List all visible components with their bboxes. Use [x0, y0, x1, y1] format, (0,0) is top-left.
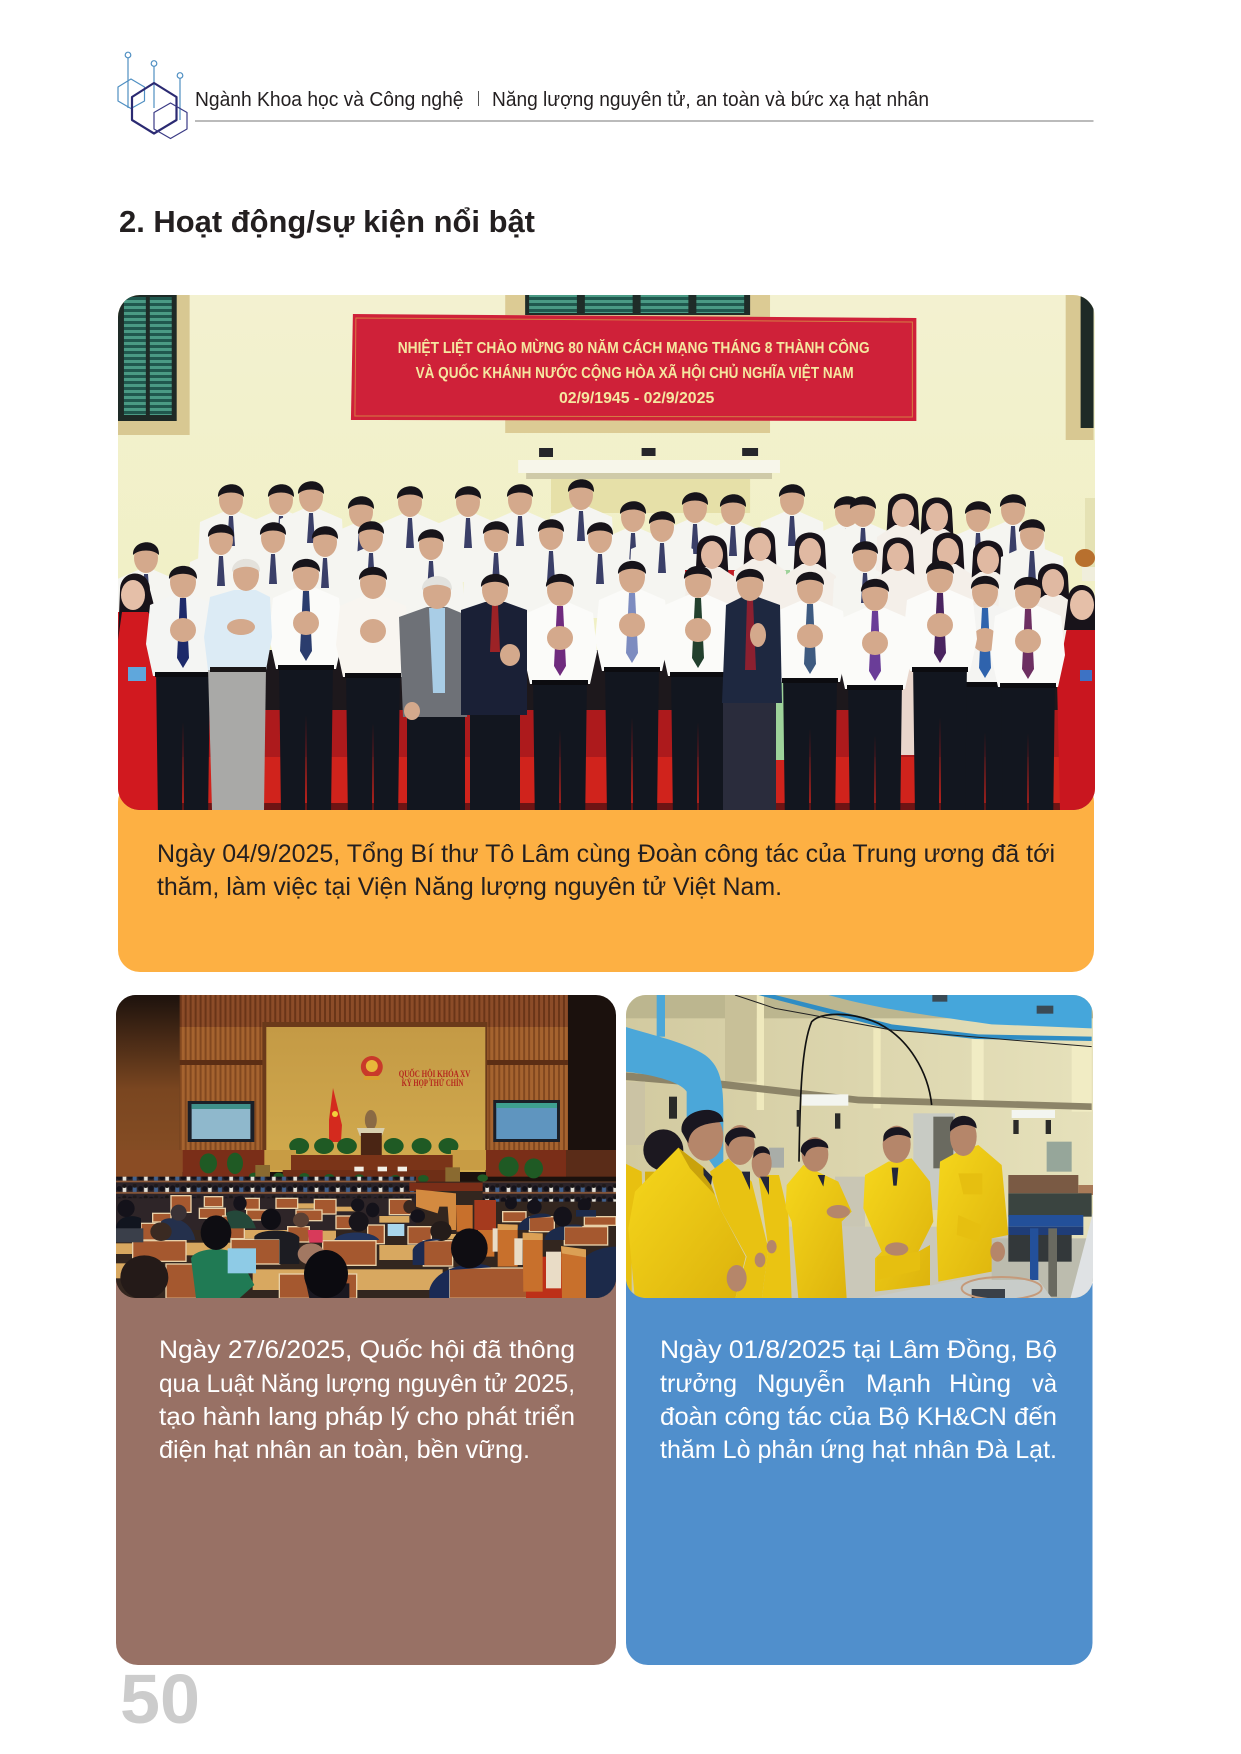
icon: hexagon logo	[118, 52, 187, 139]
flag	[329, 1088, 342, 1142]
caption: blue card: đoàn công tác của Bộ KH&CN đến	[660, 1403, 1057, 1431]
heading: 2. Hoạt động/sự kiện nổi bật	[119, 205, 535, 239]
air ducts	[625, 995, 1092, 1168]
caption: brown card	[159, 1336, 575, 1464]
caption: brown card: điện hạt nhân an toàn, bền vững.	[159, 1436, 530, 1464]
caption: blue card	[660, 1336, 1057, 1464]
caption: blue card: và	[1032, 1370, 1057, 1398]
control panel	[863, 1277, 1053, 1300]
banner: 02/9/1945 - 02/9/2025	[559, 390, 714, 407]
header text: Ngành Khoa học và Công nghệ	[195, 89, 464, 111]
chair backs	[133, 1196, 527, 1298]
caption: brown card: Ngày 27/6/2025, Quốc hội đã thông	[159, 1336, 575, 1364]
navy suit man	[722, 569, 782, 810]
dark suit man	[461, 574, 527, 815]
panel: blue event card	[625, 995, 1095, 1665]
photo: National Assembly hall	[116, 995, 616, 1299]
caption: blue card: Mạnh	[866, 1370, 931, 1398]
caption: blue card: Ngày 01/8/2025 tại Lâm Đồng, Bộ	[660, 1336, 1057, 1364]
woman in red left	[118, 574, 158, 810]
header text	[195, 89, 929, 111]
emblem	[361, 1056, 383, 1080]
caption: blue card: trưởng	[660, 1370, 737, 1398]
caption: blue card: Hùng	[949, 1370, 1011, 1398]
hall title	[399, 1068, 470, 1088]
banner: NHIỆT LIỆT CHÀO MỪNG 80 NĂM CÁCH MẠNG THÁNG 8 THÀNH CÔNG	[398, 338, 870, 357]
hall title: QUỐC HỘI KHÓA XV	[399, 1067, 470, 1080]
caption: orange card: thăm, làm việc tại Viện Năng lượng nguyên tử Việt Nam.	[157, 873, 782, 901]
woman in red right	[1057, 585, 1095, 810]
page number: 50	[120, 1660, 200, 1738]
panel: orange event card	[112, 295, 1095, 972]
desks	[116, 1203, 456, 1290]
caption: orange card	[157, 840, 1055, 901]
caption: brown card: qua Luật Năng lượng nguyên tử 2025,	[159, 1370, 575, 1398]
right-hand desk rows	[416, 1189, 616, 1298]
photo: group portrait	[112, 295, 1095, 835]
man in light blue with grey trousers	[204, 559, 272, 810]
heads	[681, 1110, 1005, 1292]
delegates from behind	[116, 1196, 491, 1299]
caption: blue card: Nguyễn	[757, 1369, 845, 1398]
panel: brown event card	[116, 995, 616, 1665]
header	[118, 52, 1094, 139]
banner	[351, 314, 916, 421]
seating area	[116, 1150, 616, 1299]
banner: VÀ QUỐC KHÁNH NƯỚC CỘNG HÒA XÃ HỘI CHỦ NGHĨA VIỆT NAM	[416, 362, 854, 382]
yellow coats	[625, 1129, 1008, 1300]
hall title: KỲ HỌP THỨ CHÍN	[402, 1077, 464, 1089]
voting screens	[188, 1100, 560, 1142]
caption: brown card: tạo hành lang pháp lý cho phát triển	[159, 1403, 575, 1431]
grey suit man	[399, 576, 471, 813]
caption: blue card: thăm Lò phản ứng hạt nhân Đà Lạt.	[660, 1436, 1057, 1464]
page	[116, 52, 1095, 1724]
header text: Năng lượng nguyên tử, an toàn và bức xạ hạt nhân	[492, 89, 929, 111]
caption: orange card: Ngày 04/9/2025, Tổng Bí thư Tô Lâm cùng Đoàn công tác của Trung ương đã tới	[157, 840, 1055, 868]
photo: reactor visit	[625, 995, 1095, 1300]
second-row women in colour	[685, 570, 914, 760]
